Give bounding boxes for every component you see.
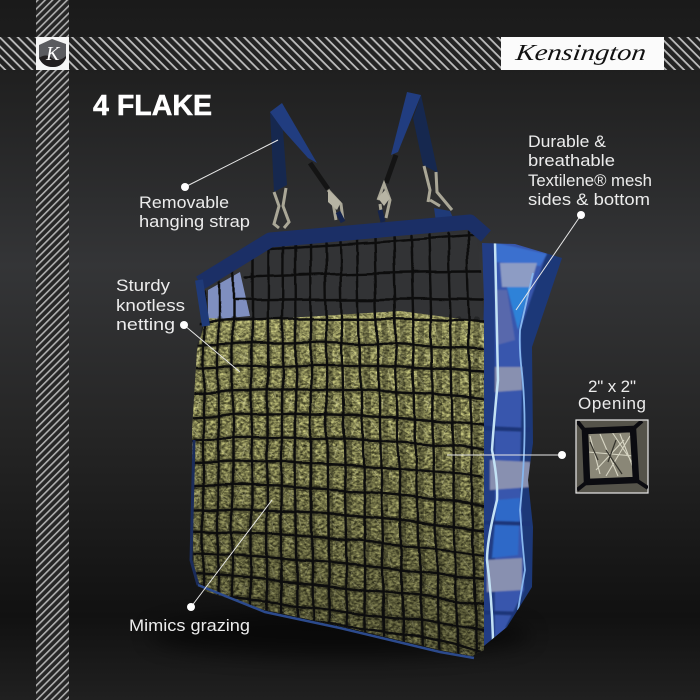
navy rim bbox=[200, 222, 486, 283]
left hanging strap bbox=[270, 103, 343, 228]
opening size heading bbox=[578, 377, 646, 413]
callout: opening pointer bbox=[447, 451, 566, 459]
callout: removable hanging strap: Removable bbox=[139, 194, 229, 212]
open top with upper netting bbox=[208, 232, 484, 330]
callout: removable hanging strap: hanging strap bbox=[139, 213, 250, 231]
horizontal stripe band bbox=[0, 37, 700, 70]
opening close-up thumbnail bbox=[576, 420, 648, 493]
callout: sturdy knotless netting: knotless bbox=[116, 297, 185, 315]
floor shadow bbox=[150, 613, 530, 657]
mesh side panel bbox=[482, 243, 562, 646]
product: hay bag bbox=[150, 92, 565, 660]
icon: brand shield logo: K bbox=[45, 43, 61, 65]
callout: durable breathable Textilene mesh: sides & bottom bbox=[528, 191, 650, 209]
hay bbox=[185, 305, 490, 660]
callout: durable breathable Textilene mesh: Textilene® mesh bbox=[528, 172, 652, 190]
netting bbox=[190, 232, 484, 660]
callout: removable hanging strap bbox=[139, 140, 278, 231]
brand wordmark: Kensington: Kensington bbox=[513, 39, 648, 65]
opening size heading: Opening bbox=[578, 394, 646, 413]
title: 4 FLAKE bbox=[93, 90, 212, 122]
callout: mimics grazing bbox=[129, 500, 272, 635]
vertical stripe band bbox=[36, 0, 69, 700]
callout: durable breathable Textilene mesh: breathable bbox=[528, 152, 615, 170]
icon: brand shield logo bbox=[36, 37, 69, 70]
callout: durable breathable Textilene mesh bbox=[516, 133, 652, 310]
callout: durable breathable Textilene mesh: Durable & bbox=[528, 133, 606, 151]
back panel patch bbox=[208, 272, 250, 320]
callout: sturdy knotless netting bbox=[116, 277, 240, 372]
right hanging strap bbox=[378, 92, 454, 222]
callout: mimics grazing: Mimics grazing bbox=[129, 617, 250, 635]
left and bottom binding bbox=[191, 280, 474, 658]
callout: sturdy knotless netting: Sturdy bbox=[116, 277, 171, 295]
brand wordmark: Kensington bbox=[501, 37, 664, 70]
opening size heading: 2" x 2" bbox=[588, 377, 636, 396]
callout: sturdy knotless netting: netting bbox=[116, 316, 175, 334]
